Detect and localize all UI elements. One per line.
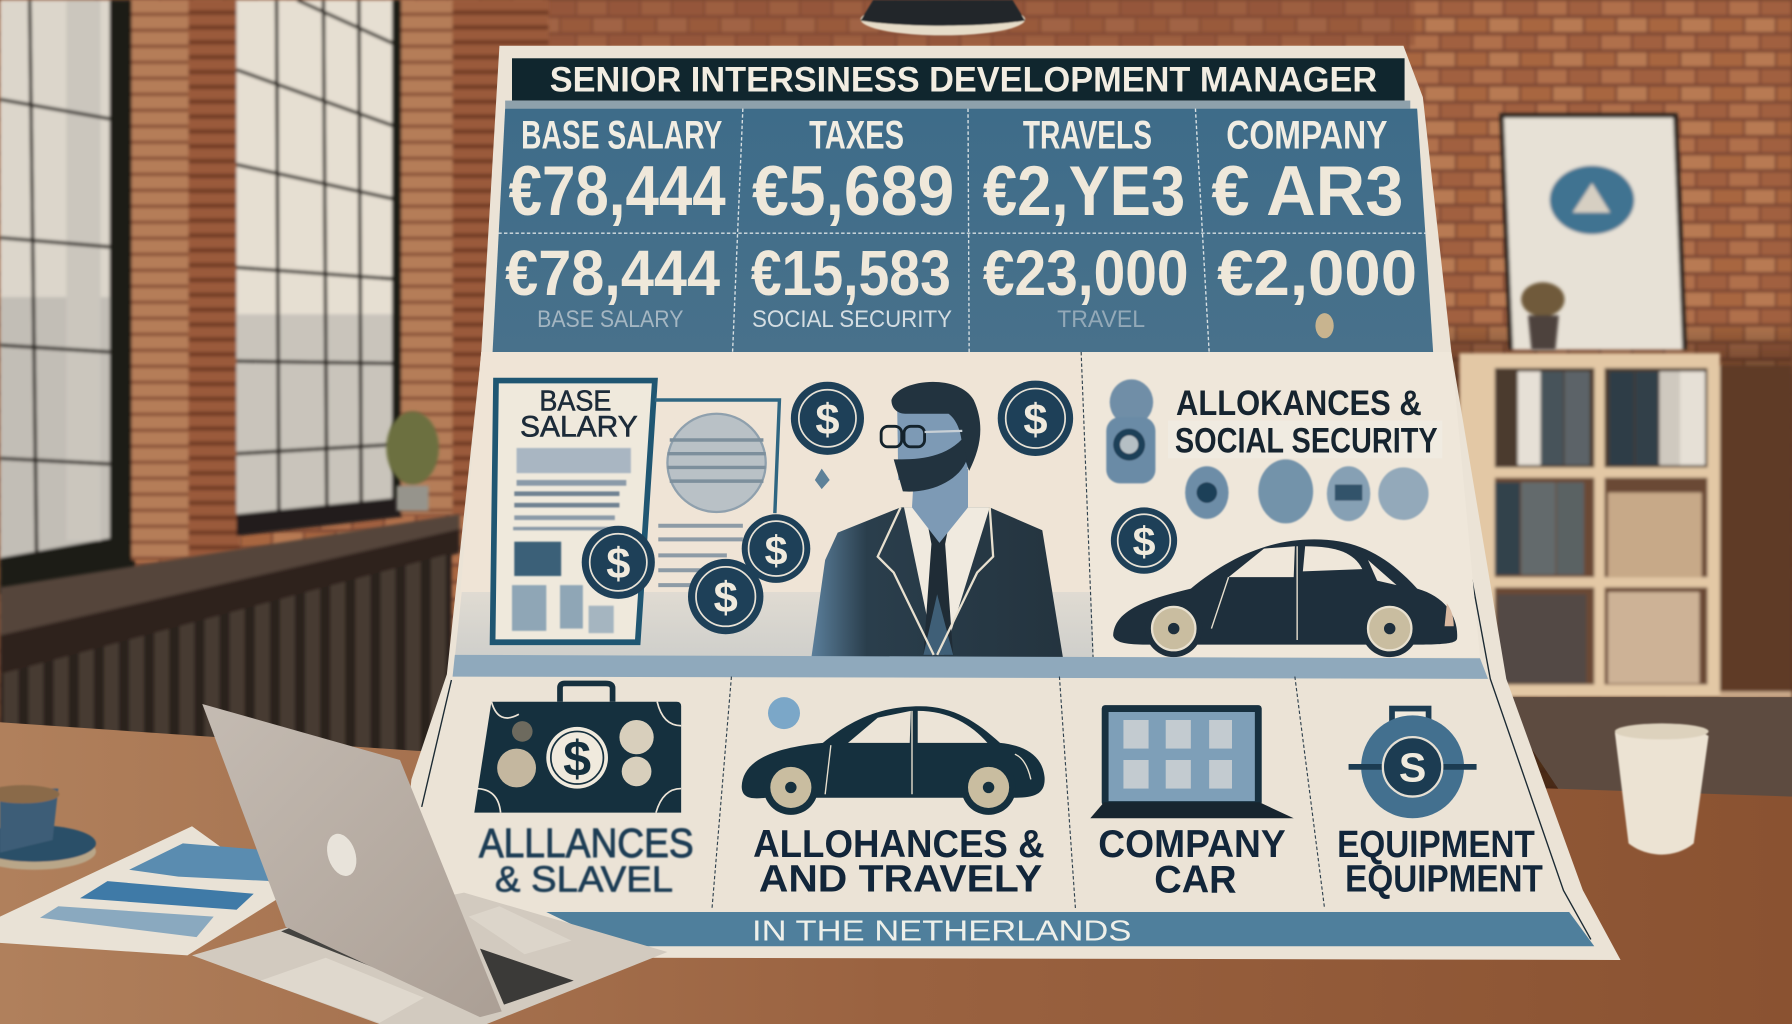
column headings: BASE SALARY	[521, 114, 723, 158]
column headings	[521, 114, 1388, 158]
heading: allowances and social security	[1168, 383, 1442, 461]
caption	[479, 820, 694, 899]
ceiling lamp	[861, 0, 1025, 35]
table	[0, 722, 1792, 1024]
first row figures: € AR3	[1211, 152, 1403, 231]
caption: COMPANY	[1098, 823, 1286, 866]
column headings: TAXES	[809, 114, 904, 158]
dollar coin: $	[714, 575, 738, 623]
laptop lid	[202, 704, 502, 1017]
dollar coin	[1111, 507, 1177, 574]
second row figures	[505, 237, 1417, 309]
caption: CAR	[1154, 859, 1237, 902]
businessman figure	[811, 382, 1063, 657]
footer bar	[546, 912, 1594, 948]
first row figures: €2,YE3	[983, 152, 1185, 231]
dollar coin: $	[1023, 396, 1047, 444]
dollar coin: $	[765, 528, 788, 574]
shelf plant	[1521, 282, 1565, 350]
salary table panel	[493, 109, 1433, 352]
dollar coin: $	[606, 540, 630, 588]
row captions: SOCIAL SECURITY	[752, 306, 952, 333]
background: left window wall	[0, 0, 549, 594]
caption: AND TRAVELY	[759, 857, 1042, 899]
row captions: TRAVEL	[1057, 306, 1145, 333]
keyboard	[480, 949, 574, 1005]
second row figures: €2,000	[1217, 237, 1417, 309]
icon: laptop	[1090, 705, 1294, 818]
small emblem	[1315, 313, 1334, 338]
small marker	[815, 469, 830, 489]
caption: EQUIPMENT	[1337, 823, 1535, 865]
title bar: SENIOR INTERSINESS DEVELOPMENT MANAGER	[550, 59, 1377, 99]
icon: equipment device	[1349, 709, 1477, 818]
caption	[1098, 823, 1286, 902]
caption	[1337, 823, 1543, 899]
trackpad	[261, 958, 424, 1023]
first row figures: €5,689	[752, 152, 954, 231]
dollar coin: $	[815, 396, 839, 444]
salary document	[493, 381, 655, 642]
second document with seal	[655, 400, 779, 585]
dollar coin	[791, 382, 864, 455]
heading: allowances and social security: ALLOKANCES &	[1176, 383, 1422, 423]
first row figures	[509, 152, 1403, 231]
icon: equipment device: S	[1399, 745, 1426, 791]
printed papers	[0, 826, 286, 955]
panel: alliances suitcase	[474, 683, 694, 899]
row captions	[537, 306, 1145, 333]
caption: ALLLANCES	[479, 820, 694, 866]
first row figures: €78,444	[509, 152, 726, 231]
salary document: SALARY	[520, 411, 638, 444]
dollar coin	[688, 559, 763, 634]
row captions: BASE SALARY	[537, 306, 683, 333]
shelf with binders and boxes	[1459, 353, 1792, 698]
icon: suitcase: $	[563, 730, 591, 787]
dollar coin: $	[1133, 518, 1156, 564]
floor strip	[1497, 697, 1792, 800]
footer bar: IN THE NETHERLANDS	[752, 916, 1131, 948]
middle section: base salary and person	[455, 352, 1094, 657]
plant on sill	[386, 411, 439, 511]
divider band	[453, 655, 1488, 679]
caption: & SLAVEL	[495, 858, 673, 899]
second row figures: €78,444	[505, 237, 720, 309]
dollar coin	[742, 514, 810, 583]
dollar coin	[582, 526, 655, 599]
middle section: allowances and car	[1081, 352, 1480, 674]
caption	[753, 823, 1045, 899]
dollar coin	[998, 381, 1073, 456]
security badge	[1106, 379, 1155, 483]
second row figures: €15,583	[751, 237, 951, 309]
apple style logo	[322, 830, 361, 880]
panel: company car laptop	[1090, 705, 1294, 902]
heading: allowances and social security: SOCIAL SECURITY	[1175, 421, 1438, 461]
sill and radiator	[0, 411, 459, 754]
salary document: BASE	[539, 385, 611, 417]
column headings: TRAVELS	[1023, 114, 1152, 158]
poster sheet	[394, 46, 1621, 960]
company car	[1113, 539, 1457, 657]
panel: allowances and travel car	[742, 697, 1045, 899]
caption: EQUIPMENT	[1345, 857, 1543, 899]
icon: sedan	[742, 706, 1045, 815]
paper cup	[1615, 723, 1709, 855]
laptop base	[192, 893, 667, 1024]
laptop	[192, 704, 667, 1024]
column headings: COMPANY	[1226, 114, 1388, 158]
coffee cup and saucer	[0, 785, 96, 870]
caption: ALLOHANCES &	[753, 823, 1045, 866]
icon: blue ball	[768, 697, 800, 729]
second row figures: €23,000	[983, 237, 1189, 309]
allowance icons row	[1185, 459, 1429, 523]
icon: suitcase	[474, 683, 681, 813]
framed wall poster	[1499, 113, 1687, 350]
bottom section panels	[474, 677, 1543, 909]
panel: equipment	[1337, 709, 1543, 899]
